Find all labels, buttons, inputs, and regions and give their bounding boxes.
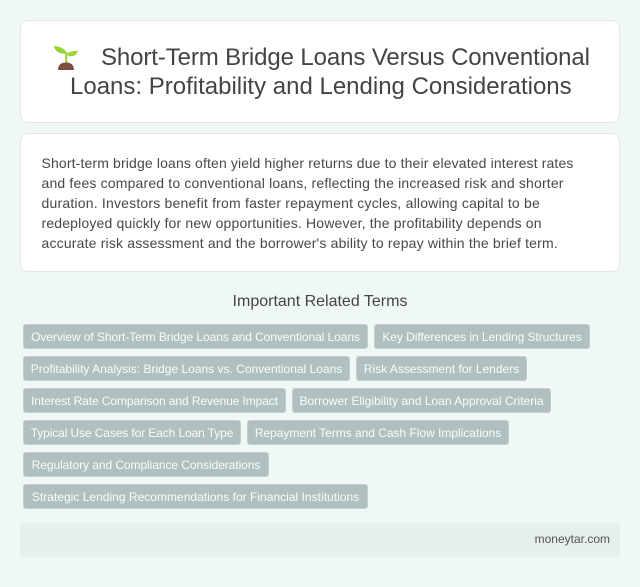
tag: Strategic Lending Recommendations for Financial Institutions [32, 490, 359, 504]
tag: Typical Use Cases for Each Loan Type [31, 426, 233, 440]
tag: Interest Rate Comparison and Revenue Impact [31, 394, 278, 408]
title [70, 44, 590, 100]
tag [374, 324, 590, 349]
tag [23, 452, 269, 477]
tag [23, 388, 286, 413]
tag [247, 420, 509, 445]
tag: Overview of Short-Term Bridge Loans and Conventional Loans [31, 330, 360, 344]
title: Loans: Profitability and Lending Considerations [70, 73, 572, 100]
icon: seedling [54, 46, 78, 70]
tag [356, 356, 527, 381]
tag [23, 484, 368, 509]
title: Short-Term Bridge Loans Versus Conventional [101, 44, 590, 71]
summary text: redeployed quickly for new opportunities. However, the profitability depends on [42, 215, 542, 231]
heading: important related terms: Important Related Terms [233, 293, 407, 310]
related terms tags [23, 324, 590, 509]
summary text: duration. Investors benefit from faster repayment cycles, allowing capital to be [42, 195, 540, 211]
footer source: moneytar.com [535, 532, 610, 546]
summary card [20, 133, 620, 272]
tag [23, 324, 368, 349]
summary text: accurate risk assessment and the borrower's ability to repay within the brief term. [42, 235, 558, 251]
tag: Borrower Eligibility and Loan Approval Criteria [299, 394, 544, 408]
tag: Profitability Analysis: Bridge Loans vs. Conventional Loans [31, 362, 342, 376]
summary text [42, 155, 574, 251]
summary text: and fees compared to conventional loans, reflecting the increased risk and shorter [42, 175, 564, 191]
tag [23, 420, 241, 445]
footer bar [20, 523, 620, 557]
tag: Repayment Terms and Cash Flow Implications [255, 426, 501, 440]
tag [292, 388, 551, 413]
tag: Regulatory and Compliance Considerations [32, 458, 260, 472]
summary text: Short-term bridge loans often yield higher returns due to their elevated interest rates [42, 155, 574, 171]
tag: Risk Assessment for Lenders [364, 362, 519, 376]
title card [20, 20, 620, 123]
tag [23, 356, 350, 381]
tag: Key Differences in Lending Structures [382, 330, 582, 344]
